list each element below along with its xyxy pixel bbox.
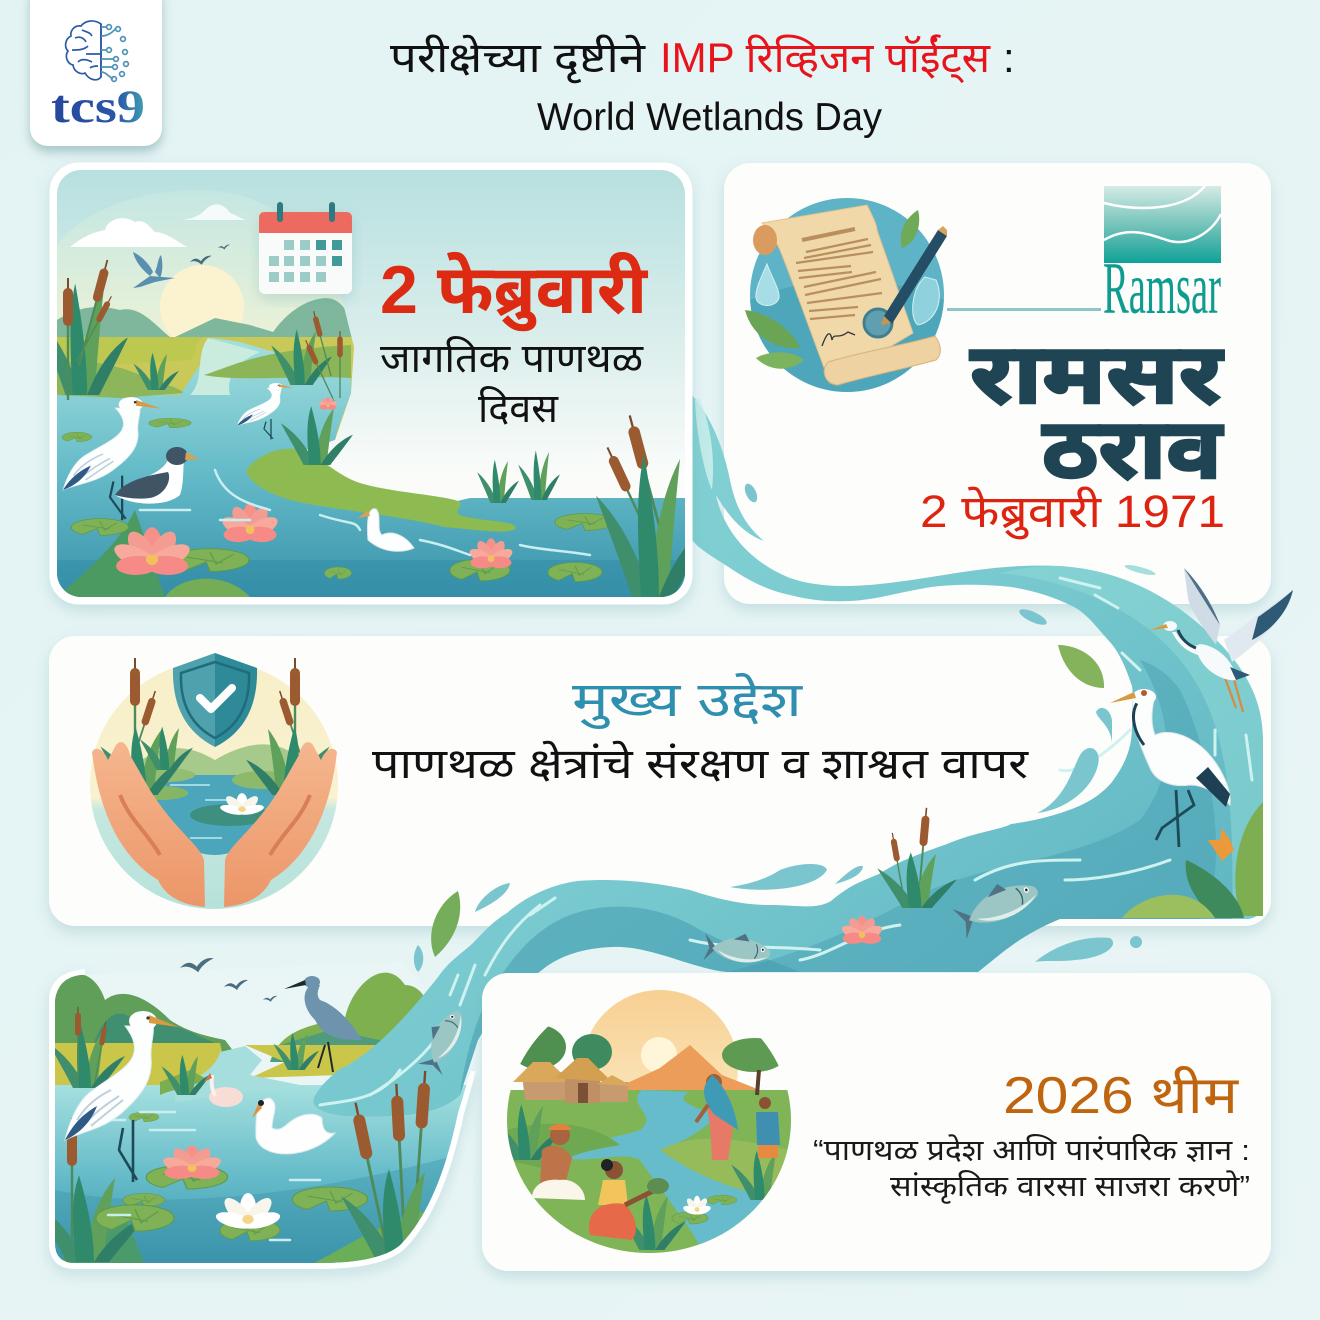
- logo wordmark: tcs9: [51, 81, 145, 133]
- panel: Ramsar convention: [724, 163, 1271, 604]
- title line 1: [390, 34, 1015, 84]
- date heading: 2 फेब्रुवारी: [380, 252, 649, 331]
- big crane: [1110, 689, 1230, 847]
- lotus bud: [840, 916, 884, 944]
- date: 2 फेब्रुवारी 1971: [920, 486, 1225, 540]
- panel: 2026 theme: [482, 973, 1271, 1271]
- kneeling woman: [589, 1159, 669, 1240]
- title line 1: :: [1003, 34, 1015, 81]
- panel: wetland scene bottom: [31, 958, 490, 1270]
- flying crane: [1150, 568, 1293, 712]
- heading: 2026 theme: 2026 थीम: [1003, 1067, 1239, 1125]
- theme text: सांस्कृतिक वारसा साजरा करणे”: [890, 1170, 1250, 1204]
- egret: [65, 1011, 178, 1182]
- fish in stream left: [702, 928, 773, 970]
- swan: [252, 1098, 335, 1154]
- right hand: [224, 742, 337, 907]
- green river bank: [246, 449, 516, 532]
- day name line 1: जागतिक पाणथळ: [380, 336, 644, 381]
- river stream: [313, 395, 1293, 1262]
- left hand: [92, 742, 205, 907]
- standing woman: [696, 1074, 738, 1160]
- large leaves corner: [1122, 802, 1263, 918]
- cattails right: [628, 415, 660, 526]
- white egret: [63, 397, 161, 520]
- small swan: [204, 1073, 243, 1107]
- pads: [123, 1193, 165, 1207]
- fish in stream right: [950, 871, 1044, 940]
- stream highlights: [320, 578, 1252, 1105]
- huts: [522, 1072, 565, 1100]
- water ripples: [108, 1112, 320, 1240]
- title line 1: परीक्षेच्या दृष्टीने: [390, 34, 646, 84]
- sky disc and sun: [57, 190, 357, 447]
- heading: main objective: मुख्य उद्देश: [572, 672, 803, 730]
- icon: treaty scroll: [745, 198, 947, 400]
- logo card: [30, 0, 162, 146]
- title line 2: World Wetlands Day: [537, 96, 882, 139]
- theme text: [813, 1134, 1250, 1204]
- calendar: [259, 202, 352, 294]
- panel: main objective: [49, 636, 1271, 926]
- icon: shield: [173, 653, 257, 747]
- village illustration: [507, 990, 791, 1253]
- heron: [284, 976, 362, 1072]
- leaf bottom left: [431, 891, 460, 957]
- Ramsar logo: [947, 186, 1221, 330]
- seated man: [532, 1124, 585, 1200]
- theme text: “पाणथळ प्रदेश आणि पारंपारिक ज्ञान :: [813, 1134, 1250, 1167]
- icon: hands holding wetland: [90, 653, 338, 909]
- fish bottom left: [413, 1004, 473, 1076]
- birds in sky: [180, 958, 214, 972]
- title line 1: IMP रिव्हिजन पॉईंट्स: [660, 34, 991, 83]
- water droplets: [414, 482, 1156, 972]
- objective text: पाणथळ क्षेत्रांचे संरक्षण व शाश्वत वापर: [372, 740, 1029, 787]
- child: [756, 1097, 780, 1158]
- heading: Thrav: ठराव: [1042, 402, 1223, 496]
- white swan: [358, 509, 414, 551]
- peach sky disc: [582, 990, 738, 1146]
- duck: [115, 447, 199, 504]
- icon: circuit brain: [66, 21, 128, 81]
- cattails on stream: [877, 807, 957, 908]
- title: [390, 34, 1015, 139]
- panel: World Wetlands Day date: [37, 166, 710, 601]
- day name line 2: दिवस: [478, 386, 559, 431]
- water: [57, 338, 685, 597]
- small egret: [237, 383, 294, 439]
- tall cattails: [341, 1070, 430, 1258]
- flying bird: [133, 252, 175, 288]
- clouds: [70, 218, 187, 247]
- leaf: [1058, 645, 1104, 688]
- heading: Ramsar: रामसर: [970, 327, 1224, 421]
